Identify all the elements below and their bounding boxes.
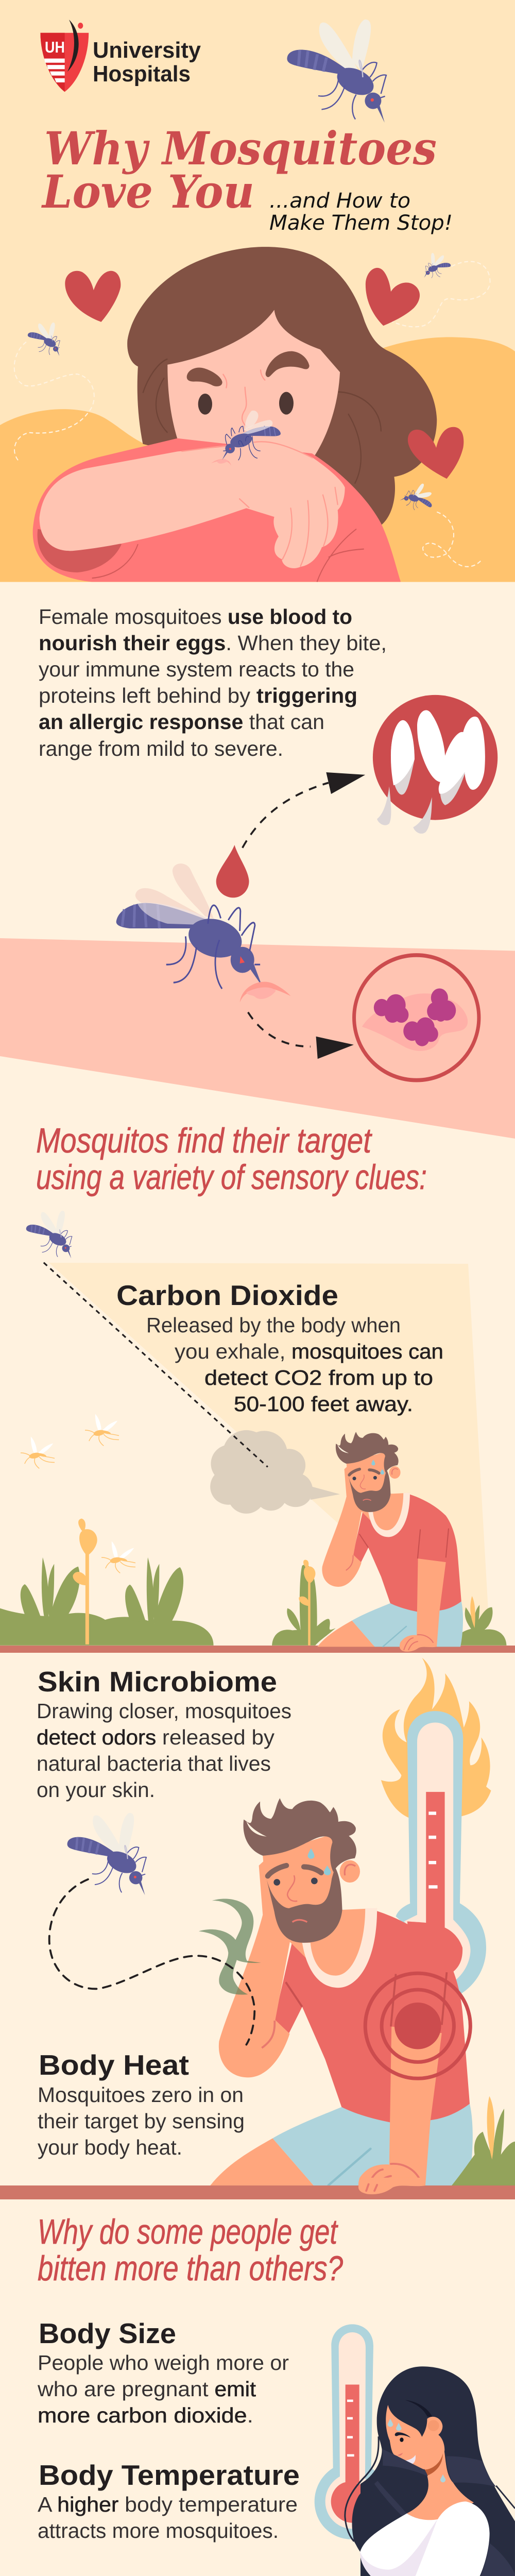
hero illustration: [0, 247, 515, 582]
icon: heart upper right: [366, 268, 420, 326]
shirt: [33, 438, 401, 582]
hair highlights: [447, 2456, 515, 2576]
body heat body: their target by sensing: [38, 2109, 245, 2133]
carbon dioxide body: [146, 1313, 443, 1416]
heading: sensory clues: Mosquitos find their target: [36, 1121, 373, 1160]
hills: [0, 337, 515, 582]
heading: bitten more: Why do some people get: [38, 2212, 338, 2251]
front hair bangs: [388, 2400, 432, 2437]
icon: top mosquito: [26, 1211, 72, 1258]
bite diagram: [116, 695, 497, 1080]
carbon dioxide body: you exhale, mosquitoes can: [175, 1340, 443, 1363]
logo: [40, 20, 201, 92]
face: [167, 310, 340, 457]
icon: microbiome mosquito: [67, 1813, 146, 1895]
sweat drops: [388, 2419, 445, 2482]
nose and skin lines: [182, 370, 313, 507]
icon: UH shield: [40, 20, 89, 92]
skin microbiome body: natural bacteria that lives: [37, 1752, 271, 1775]
intro text: proteins left behind by triggering: [39, 684, 357, 707]
eyebrows: [187, 368, 222, 386]
title: Why Mosquitoes: [44, 122, 437, 175]
intro text: nourish their eggs. When they bite,: [39, 631, 387, 655]
icon: orange mosquito 1: [85, 1414, 119, 1446]
flames: [381, 1658, 491, 1818]
center plant: [272, 1560, 336, 1646]
icon: small mosquito lower right: [400, 480, 439, 519]
heading: bitten more: bitten more than others?: [38, 2249, 343, 2288]
ear: [427, 2417, 442, 2435]
finger lines: [283, 487, 338, 566]
front hair lock: [352, 2436, 428, 2552]
intro text: [39, 605, 387, 760]
body size body: People who weigh more or: [38, 2351, 289, 2375]
heading: skin microbiome: Skin Microbiome: [38, 1666, 277, 1698]
icon: large mosquito: [287, 20, 386, 123]
body heat body: Mosquitoes zero in on: [38, 2083, 244, 2107]
heading: body heat: Body Heat: [39, 2049, 189, 2081]
body temperature body: A higher body temperature: [38, 2493, 298, 2516]
cloud of carbon dioxide: [210, 1430, 340, 1514]
heat rings: [365, 1973, 470, 2078]
eyes: [198, 394, 212, 415]
logo initials: UH: [45, 38, 65, 56]
face: [386, 2405, 444, 2469]
dashed flight paths: [14, 262, 490, 567]
panel: skin microbiome and body heat: [37, 1658, 515, 2194]
icon: small mosquito left: [28, 323, 60, 356]
icon: heart left: [65, 271, 121, 322]
icon: sighing man: [317, 1432, 463, 1652]
odor wisps: [199, 1899, 261, 1995]
skin microbiome body: detect odors released by: [37, 1725, 275, 1749]
right plant: [452, 1596, 506, 1646]
skin microbiome body: Drawing closer, mosquitoes: [37, 1699, 291, 1723]
illustration: woman and thermometer: [315, 2324, 515, 2576]
subtitle: [269, 189, 453, 235]
subtitle: ...and How to: [269, 189, 410, 213]
icon: orange mosquito 2: [21, 1436, 55, 1468]
hand over lower bar: [358, 2178, 425, 2194]
title: Love You: [41, 165, 254, 218]
orange flower stem: [73, 1519, 97, 1645]
panel: why some people get bitten: [37, 2212, 515, 2576]
body temperature text: [38, 2459, 300, 2543]
face details: [182, 351, 313, 507]
hero background: [0, 0, 515, 582]
icon: bite mark: [240, 982, 290, 1003]
heading: sensory clues: [36, 1121, 427, 1197]
back hair: [360, 2366, 515, 2576]
icon: small mosquito top right: [424, 252, 452, 281]
body size body: who are pregnant emit: [37, 2377, 256, 2401]
ground bar upper: [0, 1646, 515, 1653]
stray hair strand: [345, 2436, 379, 2541]
dashed flight path: [49, 1879, 254, 2045]
heading: bitten more: [38, 2212, 343, 2288]
logo: Hospitals: [93, 61, 191, 87]
body size text: [37, 2317, 289, 2427]
intro text: your immune system reacts to the: [39, 657, 354, 681]
heading: body size: Body Size: [39, 2317, 176, 2349]
ground plants left: [0, 1557, 214, 1646]
panel: how bites work: [0, 605, 515, 1139]
title: [41, 122, 437, 218]
icon: man with fever: [210, 1798, 473, 2194]
hearts and small mosquitoes: [65, 268, 464, 479]
icon: rash circle: [354, 955, 479, 1080]
carbon dioxide text: [116, 1279, 443, 1416]
arrow: blood to eggs: [243, 772, 365, 848]
shirt: [360, 2501, 490, 2576]
icon: heart lower right: [408, 427, 464, 479]
hair: [127, 247, 437, 525]
thermometer with flames: [381, 1658, 491, 1997]
body heat text: [38, 2049, 245, 2159]
ground bar lower: [0, 2185, 515, 2199]
heading: carbon dioxide: Carbon Dioxide: [116, 1279, 338, 1311]
carbon dioxide body: 50-100 feet away.: [234, 1392, 413, 1416]
dashed sensing line: [44, 1263, 268, 1467]
thermometer: [315, 2324, 390, 2539]
icon: egg circle: [373, 695, 497, 834]
heat, odor and flight path: [49, 1879, 515, 2185]
right edge plant: [452, 2096, 515, 2185]
subtitle: Make Them Stop!: [269, 211, 453, 235]
skin microbiome text: [37, 1666, 291, 1802]
intro text: range from mild to severe.: [39, 737, 283, 760]
scent cone: [49, 1263, 489, 1628]
carbon dioxide body: Released by the body when: [146, 1313, 401, 1337]
skin microbiome body: [37, 1699, 291, 1802]
forearm and hand: [40, 443, 345, 568]
facial features: [395, 2432, 416, 2464]
icon: blood drop: [216, 845, 249, 897]
body heat body: your body heat.: [38, 2136, 182, 2159]
icon: orange mosquito 3: [101, 1541, 135, 1573]
arrow: bite to reaction: [248, 1012, 354, 1059]
thermometer tube: [407, 1711, 486, 1997]
skin microbiome body: on your skin.: [37, 1778, 155, 1802]
sensory illustration: [0, 1263, 506, 1646]
panel: sensory clues: [0, 1121, 515, 1653]
carbon dioxide body: detect CO2 from up to: [204, 1366, 433, 1389]
skin band: [0, 938, 515, 1139]
body temperature body: [38, 2493, 298, 2543]
logo wordmark: University: [93, 38, 201, 63]
intro text: Female mosquitoes use blood to: [39, 605, 352, 629]
body heat body: [38, 2083, 245, 2159]
icon: mosquito on arm: [222, 411, 281, 460]
icon: biting mosquito: [116, 863, 262, 989]
body size body: more carbon dioxide .: [38, 2403, 253, 2427]
body temperature body: attracts more mosquitoes.: [38, 2519, 279, 2543]
panel: hero: [0, 0, 515, 582]
body size body: [37, 2351, 289, 2427]
neck and shoulders: [407, 2444, 474, 2520]
heading: body temperature: Body Temperature: [39, 2459, 300, 2491]
intro text: an allergic response that can: [39, 710, 324, 734]
bite mark: [211, 459, 231, 466]
